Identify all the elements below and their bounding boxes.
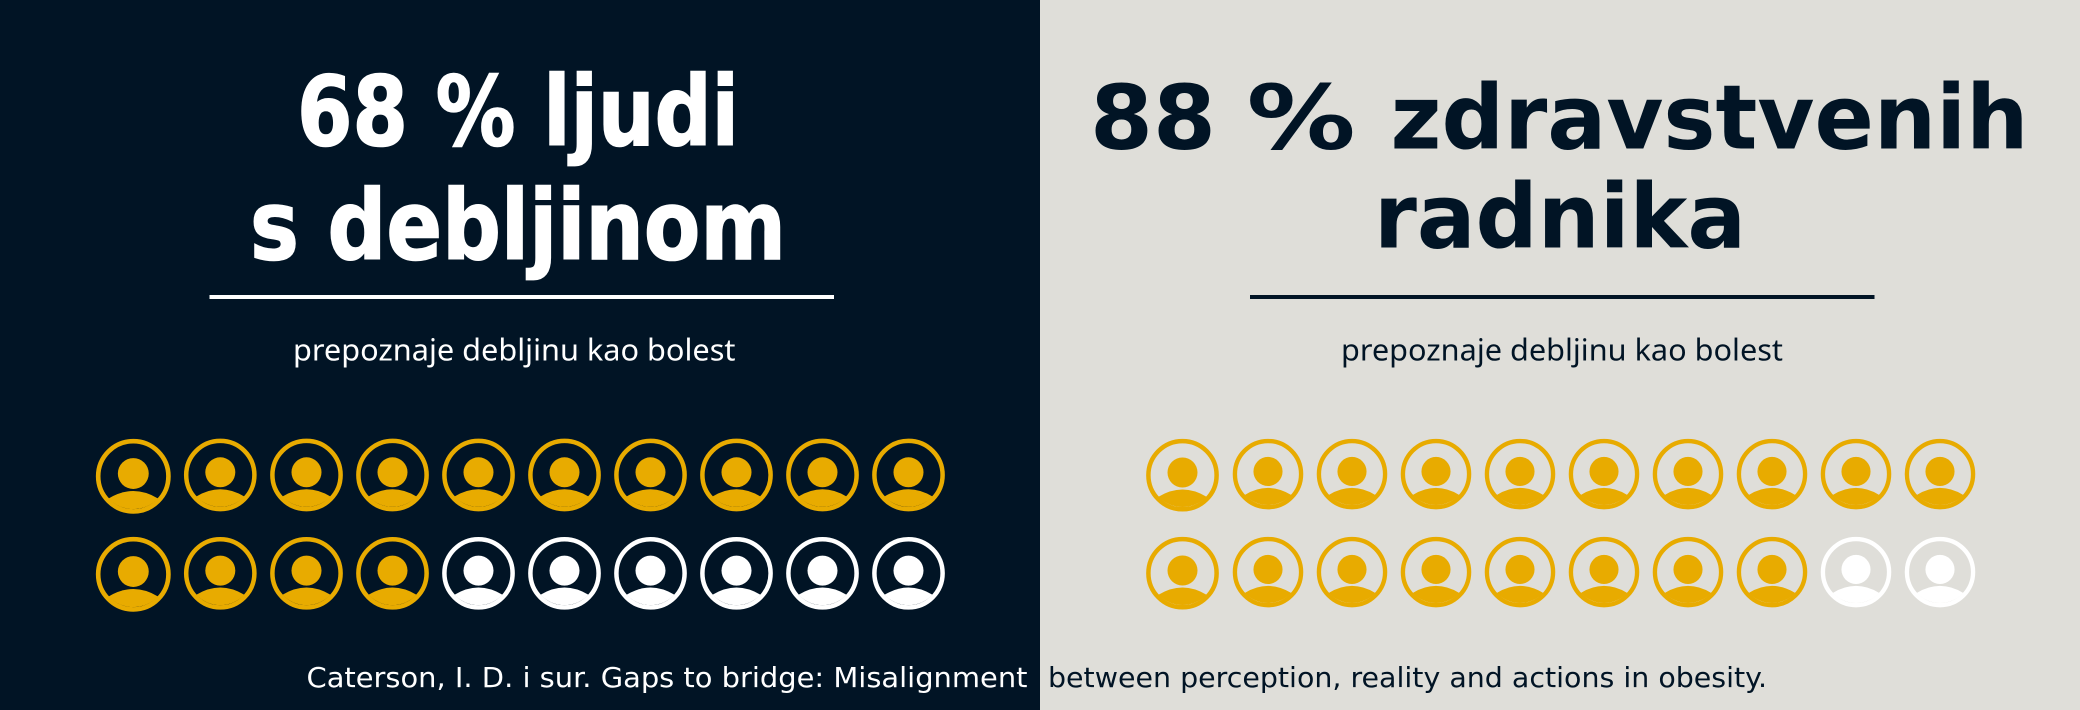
footer: source citation: Caterson, I. D. i sur. Gaps to bridge: Misalignment <box>306 661 1028 694</box>
panel: right background <box>1040 0 2080 710</box>
heading: 88 % zdravstvenih radnika: zdravstvenih <box>1390 65 2028 169</box>
heading: 88 % zdravstvenih radnika <box>1090 65 2028 269</box>
heading: 68 % ljudi s debljinom <box>250 56 786 282</box>
icon grid: right, 88 of 100 people highlighted <box>1148 441 1973 607</box>
icon grid: left, 68 of 100 people highlighted <box>98 441 943 609</box>
text: right subtitle: prepoznaje debljinu kao bolest <box>1341 329 1783 370</box>
heading: 88 % zdravstvenih radnika: radnika <box>1374 165 1746 269</box>
panel: left background <box>0 0 1040 710</box>
heading: 68 % ljudi s debljinom: 68 % ljudi <box>297 56 739 168</box>
divider: left rule <box>210 295 834 299</box>
text: left subtitle: prepoznaje debljinu kao bolest <box>293 329 736 370</box>
footer: source citation: between perception, reality and actions in obesity. <box>1048 661 1767 694</box>
divider: right rule <box>1250 295 1874 299</box>
heading: 88 % zdravstvenih radnika: 88 <box>1090 65 1216 169</box>
heading: 88 % zdravstvenih radnika: % <box>1247 65 1356 169</box>
heading: 68 % ljudi s debljinom: s debljinom <box>250 170 786 282</box>
footer: source citation <box>306 661 1767 694</box>
